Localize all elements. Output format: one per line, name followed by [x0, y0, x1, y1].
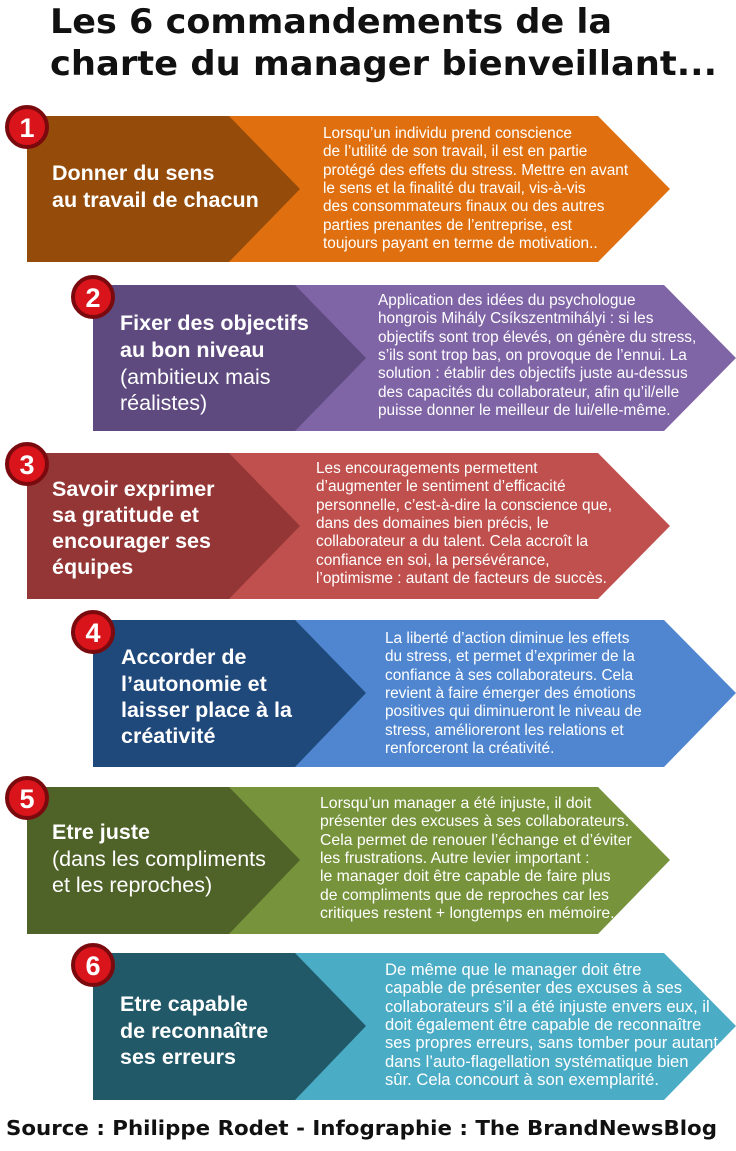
body 4: confiance à ses collaborateurs. Cela [385, 667, 634, 684]
body 1 [323, 125, 629, 252]
heading 4: Accorder de [121, 645, 247, 669]
heading 2: au bon niveau [120, 338, 265, 362]
heading 6: ses erreurs [120, 1045, 236, 1069]
heading 3: Savoir exprimer [52, 477, 215, 501]
title [50, 2, 717, 84]
body 1: Lorsqu’un individu prend conscience [323, 125, 572, 142]
body 3: confiance en soi, la persévérance, [316, 552, 550, 569]
body 4: du stress, et permet d’exprimer de la [385, 648, 635, 665]
body 6: sûr. Cela concourt à son exemplarité. [385, 1070, 659, 1089]
body 3: collaborateur a du talent. Cela accroît la [316, 533, 588, 550]
heading 5 [52, 820, 266, 897]
body 4: positives qui diminueront le niveau de [385, 703, 642, 720]
heading 2: réalistes) [120, 391, 207, 415]
body 2: objectifs sont trop élevés, on génère du stress, [378, 329, 696, 346]
panel 4 [93, 620, 736, 767]
heading 4: créativité [121, 724, 215, 748]
body 6: dans l’auto-flagellation systématique bien [385, 1052, 688, 1071]
badge 2: 2 [85, 283, 101, 313]
heading 3 [52, 477, 215, 579]
body 4: La liberté d’action diminue les effets [385, 630, 630, 647]
body 2 [378, 292, 696, 419]
body 6: doit également être capable de reconnaître [385, 1015, 701, 1034]
heading 2: Fixer des objectifs [120, 311, 309, 335]
footer source: Source : Philippe Rodet - Infographie : The BrandNewsBlog [6, 1116, 717, 1140]
body 4 [385, 630, 642, 757]
body 3: l’optimisme : autant de facteurs de succès. [316, 570, 607, 587]
heading 4: l’autonomie et [121, 672, 267, 696]
body 2: hongrois Mihály Csíkszentmihályi : si les [378, 310, 654, 327]
body 1: des consommateurs finaux ou des autres [323, 198, 605, 215]
body 6: ses propres erreurs, sans tomber pour autant [385, 1033, 718, 1052]
body 2: solution : établir des objectifs juste au-dessus [378, 365, 688, 382]
body 3: d’augmenter le sentiment d’efficacité [316, 478, 566, 495]
body 1: de l’utilité de son travail, il est en partie [323, 143, 587, 160]
body 1: protégé des effets du stress. Mettre en avant [323, 162, 629, 179]
body 5 [320, 795, 632, 922]
title: Les 6 commandements de la [50, 2, 612, 42]
body 3: personnelle, c’est-à-dire la conscience que, [316, 497, 612, 514]
body 2: s’ils sont trop bas, on provoque de l’ennui. La [378, 347, 687, 364]
heading 2: (ambitieux mais [120, 365, 271, 389]
badge 4: 4 [85, 618, 101, 648]
badge 1 [7, 107, 47, 147]
body 3 [316, 460, 612, 587]
heading 1: Donner du sens [52, 161, 215, 185]
badge 2 [73, 277, 113, 317]
body 4: revient à faire émerger des émotions [385, 685, 636, 702]
body 3: dans des domaines bien précis, le [316, 515, 549, 532]
body 6 [385, 960, 718, 1089]
body 4: stress, amélioreront les relations et [385, 722, 624, 739]
heading 5: (dans les compliments [52, 847, 266, 871]
heading 3: encourager ses [52, 529, 211, 553]
body 5: le manager doit être capable de faire plus [320, 868, 611, 885]
heading 3: sa gratitude et [52, 503, 199, 527]
body 1: le sens et la finalité du travail, vis-à-vis [323, 180, 586, 197]
heading 6: de reconnaître [120, 1019, 268, 1043]
badge 5: 5 [19, 784, 35, 814]
badge 3: 3 [19, 450, 35, 480]
title: charte du manager bienveillant... [50, 44, 717, 84]
body 3: Les encouragements permettent [316, 460, 538, 477]
badge 5 [7, 778, 47, 818]
panel 1 [27, 116, 670, 262]
heading 1 [52, 161, 259, 212]
body 6: De même que le manager doit être [385, 960, 641, 979]
body 2: des capacités du collaborateur, afin qu’il/elle [378, 384, 679, 401]
heading 1: au travail de chacun [52, 188, 259, 212]
heading 2 [120, 311, 309, 415]
panel 6 [93, 953, 736, 1100]
panel 5 [27, 787, 670, 934]
heading 6 [120, 992, 268, 1069]
body 6: collaborateurs s’il a été injuste envers eux, il [385, 997, 710, 1016]
body 1: toujours payant en terme de motivation.. [323, 235, 598, 252]
badge 3 [7, 444, 47, 484]
badge 4 [73, 612, 113, 652]
body 5: Cela permet de renouer l’échange et d’éviter [320, 832, 632, 849]
badge 6: 6 [85, 951, 101, 981]
heading 5: Etre juste [52, 820, 150, 844]
badge 6 [73, 945, 113, 985]
badge 1: 1 [19, 113, 35, 143]
heading 4 [121, 645, 293, 748]
body 5: présenter des excuses à ses collaborateurs. [320, 813, 629, 830]
body 5: de compliments que de reproches car les [320, 887, 609, 904]
heading 6: Etre capable [120, 992, 248, 1016]
heading 5: et les reproches) [52, 873, 212, 897]
body 5: les frustrations. Autre levier important : [320, 850, 590, 867]
body 2: puisse donner le meilleur de lui/elle-même. [378, 402, 671, 419]
body 2: Application des idées du psychologue [378, 292, 636, 309]
body 5: critiques restent + longtemps en mémoire. [320, 905, 615, 922]
heading 4: laisser place à la [121, 698, 293, 722]
body 1: parties prenantes de l’entreprise, est [323, 217, 573, 234]
body 6: capable de présenter des excuses à ses [385, 978, 682, 997]
body 5: Lorsqu’un manager a été injuste, il doit [320, 795, 592, 812]
heading 3: équipes [52, 555, 133, 579]
body 4: renforceront la créativité. [385, 740, 554, 757]
panel 3 [27, 453, 670, 599]
panel 2 [93, 285, 736, 431]
